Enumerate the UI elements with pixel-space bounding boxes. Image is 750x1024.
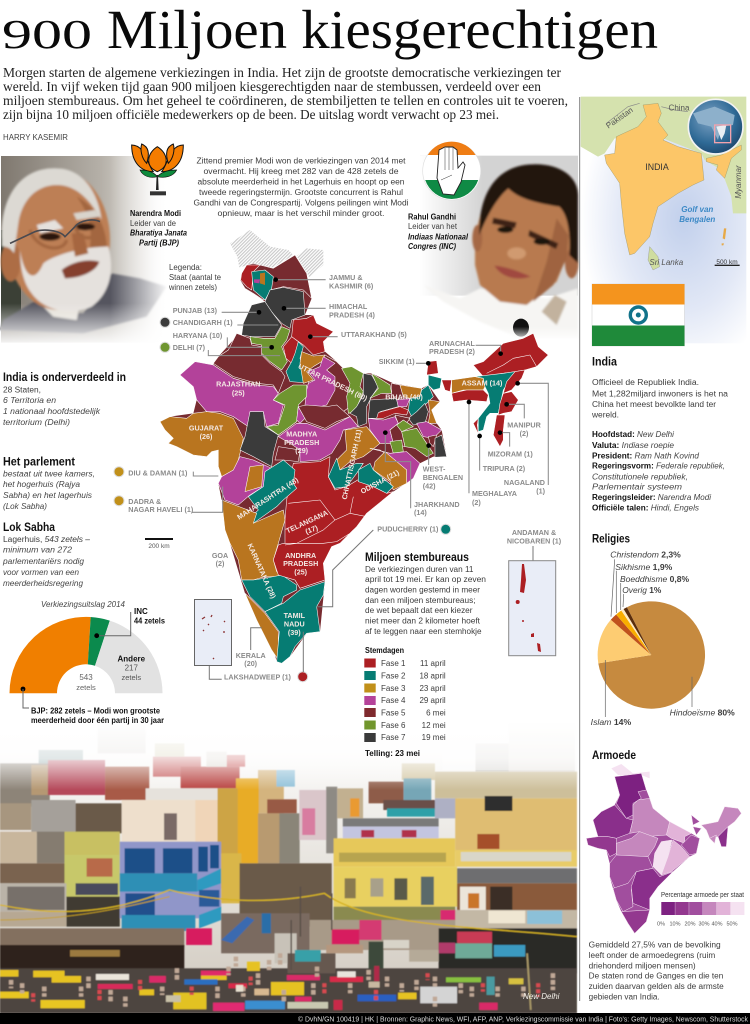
state labels on the map: ODISHA (21): [359, 468, 401, 496]
photo: Narendra Modi: [0, 156, 174, 347]
text: Lok Sabha: Lok Sabha: [3, 520, 55, 534]
legend: voting days: [364, 646, 446, 758]
state labels outside the map: HIMACHAL: [329, 302, 368, 311]
caption: Modi: Leider van de: [130, 219, 177, 228]
state labels outside the map: (42): [423, 482, 436, 490]
state labels outside the map: SIKKIM (1): [379, 357, 415, 366]
map legend note: Staat (aantal te: [169, 273, 222, 282]
Andere label: [118, 654, 146, 682]
state labels on the map: MAHARASHTRA (48): [235, 475, 300, 522]
pie labels: Sikhisme 1,9%: [615, 563, 672, 572]
locator map labels: Sri Lanka: [649, 258, 684, 267]
BJP label: meerderheid door één partij in 30 jaar: [31, 716, 164, 725]
state labels outside the map: JAMMU &: [329, 273, 363, 282]
text: Lok Sabha: meerderheidsregering: [3, 579, 84, 588]
photo caption: New Delhi: [523, 992, 560, 1001]
legend: voting days: Stemdagen: [365, 646, 404, 655]
text: poverty: leeft onder de armoedegrens (ruim: [589, 951, 716, 960]
state: Karnataka and Goa: [222, 500, 297, 612]
state labels on the map: GUJARAT: [189, 424, 224, 432]
text: parliament: (Lok Sabha): [3, 502, 47, 511]
lead text: absolute meerderheid in het Lagerhuis en hoopt op een: [198, 178, 404, 186]
state labels outside the map: DADRA &: [128, 497, 161, 506]
scale bar: 200 km: [148, 543, 170, 550]
locator map labels: Pakistan: [604, 105, 635, 130]
state group: northwest: [180, 287, 333, 427]
BJP lotus logo: [132, 144, 183, 195]
map: India election phases by state: [160, 230, 548, 663]
legend: poverty percentage: 40%: [711, 922, 723, 928]
inset: Lakshadweep: [194, 600, 232, 666]
state labels outside the map: MEGHALAYA: [472, 489, 517, 498]
locator map: [581, 97, 746, 343]
text: polling stations: de wet bepaalt dat een kiezer: [365, 606, 473, 615]
left skyline: [0, 723, 295, 813]
legend: voting days: Fase 3: [381, 684, 406, 693]
state labels outside the map: MIZORAM (1): [488, 450, 533, 458]
photo: Rahul Gandhi: [420, 156, 578, 342]
state labels outside the map: JHARKHAND: [414, 500, 460, 509]
legend: voting days: 23 april: [419, 684, 446, 693]
map leader dots: [257, 277, 520, 448]
state labels on the map: (25): [294, 568, 308, 576]
state labels outside the map: PUNJAB (13): [173, 306, 218, 315]
state labels on the map: MADHYA: [286, 430, 317, 438]
state labels outside the map: NAGALAND: [504, 478, 545, 487]
text: polling stations: Miljoen stembureaus: [365, 550, 469, 564]
state labels on the map: PRADESH: [284, 438, 319, 447]
text: polling stations: niet meer dan 2 kilometer hoeft: [365, 616, 481, 626]
marker dots for small territories: [114, 317, 451, 682]
INC label: [94, 607, 166, 638]
byline: HARRY KASEMIR: [3, 133, 68, 142]
text: poverty: zuiden daarvan gelden als de armste: [589, 982, 724, 991]
legend: poverty percentage: [657, 892, 744, 928]
text: India divided: territorium (Delhi): [3, 418, 70, 427]
country facts: President: Ram Nath Kovind: [592, 451, 700, 460]
state: Andhra Pradesh coast: [273, 530, 353, 588]
country facts: China het meest bevolkte land ter: [592, 400, 716, 409]
state labels outside the map: UTTARAKHAND (5): [341, 330, 407, 339]
state labels on the map: (26): [200, 432, 213, 441]
state labels outside the map: MANIPUR: [507, 420, 542, 430]
locator map labels: China: [669, 104, 690, 112]
flag of India: [592, 284, 684, 346]
state labels outside the map: KERALA: [236, 651, 266, 660]
legend: voting days: Fase 1: [381, 659, 406, 668]
state labels outside the map: TRIPURA (2): [483, 464, 526, 473]
state labels outside the map: (2): [216, 559, 225, 568]
country facts: Officiële talen: Hindi, Engels: [592, 503, 699, 512]
state labels on the map: KARNATAKA (28): [246, 542, 278, 600]
chart: religions pie: [591, 532, 735, 727]
legend: poverty percentage: 10%: [669, 922, 681, 928]
map legend note: [168, 263, 222, 292]
state lines in Telangana: [285, 500, 335, 545]
text: India divided: 28 Staten,: [3, 386, 41, 394]
legend: poverty percentage: 30%: [698, 922, 710, 928]
country facts: Parlementair systeem: [592, 482, 682, 491]
country facts: Regeringsvorm: Federale republiek,: [592, 462, 725, 471]
legend: voting days: Fase 7: [381, 733, 406, 742]
map legend note: winnen zetels): [168, 283, 217, 292]
photo: street scene in New Delhi: [0, 720, 577, 1013]
text: polling stations: april tot 19 mei. Er kan op zeven: [365, 575, 486, 584]
locator map labels: Myanmar: [734, 165, 743, 199]
state: Kerala: [245, 593, 278, 660]
text: India divided: 1 nationaal hoofdstedelijk: [3, 407, 101, 416]
country facts: Valuta: Indiase roepie: [592, 441, 675, 450]
base silhouette of India: [160, 255, 447, 663]
locator map labels: INDIA: [645, 162, 669, 172]
crowd figures: [11, 953, 553, 1007]
map leader lines: [192, 280, 548, 512]
state labels on the map: TELANGANA: [285, 508, 329, 535]
legend: voting days: Fase 6: [381, 721, 406, 730]
Andere label: Andere: [118, 654, 146, 664]
state: Madhya Pradesh: [240, 385, 358, 467]
state labels outside the map: GOA: [212, 551, 228, 560]
text: polling stations: af te leggen naar een stemhokje: [365, 627, 482, 636]
caption: Rahul Gandhi: Leider van het: [408, 222, 458, 231]
chart: election result 2014 half donut: Verkiezingsuitslag 2014: [41, 600, 126, 609]
state: Jammu and Kashmir: [240, 255, 312, 300]
slice: INC: [88, 617, 110, 666]
pie labels: Christendom 2,3%: [610, 550, 681, 560]
state labels outside the map: NICOBAREN (1): [507, 536, 562, 546]
Andere label: 217: [125, 664, 139, 672]
text: India divided: 6 Territoria en: [3, 396, 57, 405]
state labels on the map: NADU: [284, 620, 305, 628]
state labels on the map: CHHATTISGARH (11): [340, 428, 363, 500]
state labels outside the map: (20): [244, 659, 258, 668]
state labels outside the map: PRADESH (2): [429, 347, 476, 356]
locator map labels: Golf van: [681, 205, 713, 214]
legend: voting days: 11 april: [420, 659, 446, 668]
state labels outside the map: KASHMIR (6): [329, 282, 374, 290]
state labels outside the map: (1): [536, 486, 546, 496]
left buildings: [0, 778, 259, 975]
state: Maharashtra: [218, 457, 297, 523]
BJP label: BJP: 282 zetels – Modi won grootste: [31, 706, 161, 716]
chart: election result 2014 half donut: [10, 600, 166, 725]
map: poverty per state: [586, 764, 741, 933]
legend: voting days: Telling: 23 mei: [365, 749, 420, 758]
state labels on the map: BIHAR (40): [385, 392, 423, 402]
text: parliament: bestaat uit twee kamers,: [3, 470, 95, 478]
legend: voting days: 29 april: [419, 696, 446, 705]
locator map labels: Bengalen: [679, 215, 715, 224]
state labels on the map: (17): [304, 523, 320, 536]
legend: voting days: 12 mei: [422, 721, 446, 730]
state labels outside the map: NAGAR HAVELI (1): [128, 505, 194, 514]
text: poverty: De staten rond de Ganges en die ten: [589, 972, 723, 981]
country facts: Hoofdstad: New Delhi: [592, 430, 674, 439]
state labels outside the map: WEST-: [423, 464, 446, 474]
lead text: [194, 156, 409, 218]
state labels on the map: UTTAR PRADESH (80): [297, 362, 369, 403]
state labels outside the map: PRADESH (4): [329, 310, 376, 320]
total seats label: [76, 673, 96, 692]
intro text: [3, 66, 568, 123]
state: Uttar Pradesh: [286, 342, 363, 413]
locator map labels: [604, 104, 743, 267]
title: Miljoen kiesgerechtigen: [107, 0, 658, 60]
state labels outside the map: BENGALEN: [423, 473, 463, 482]
state: West Bengal and Sikkim: [408, 361, 452, 425]
state labels outside the map: (14): [414, 508, 427, 517]
text: parliament: [3, 454, 95, 511]
caption: Rahul Gandhi: Congres (INC): [408, 242, 456, 251]
slice: BJP: [10, 617, 91, 693]
state labels outside the map: DIU & DAMAN (1): [128, 468, 188, 478]
text: Lok Sabha: minimum van 272: [3, 546, 73, 554]
legend: poverty percentage: 50%: [726, 922, 738, 928]
state labels outside the map: ARUNACHAL: [429, 339, 476, 348]
text: poverty: Gemiddeld 27,5% van de bevolking: [589, 940, 721, 950]
state labels outside the map: (2): [520, 429, 529, 438]
right column divider: [579, 97, 580, 1001]
state labels outside the map: PUDUCHERRY (1): [377, 524, 439, 534]
lead text: Gandhi van de Congrespartij. Volgens peilingen wint Modi: [194, 198, 409, 208]
caption: Rahul Gandhi: Indiaas Nationaal: [408, 232, 469, 242]
country facts: Constitutionele republiek,: [592, 472, 688, 481]
right skyline: [310, 723, 577, 973]
slice: Andere: [95, 621, 162, 693]
state labels on the map: (25): [232, 388, 245, 398]
caption: Modi: Bharatiya Janata: [130, 228, 187, 238]
base silhouette: [586, 773, 700, 933]
intro text: miljoen stembureaus. Om het geheel te coördineren, de stembiljetten te tellen en controles uit te voeren,: [3, 94, 568, 109]
pie labels: Islam 14%: [591, 718, 631, 727]
caption: Modi: [130, 209, 187, 248]
legend: voting days: 6 mei: [426, 708, 446, 718]
microphone: [513, 319, 529, 337]
state labels outside the map: CHANDIGARH (1): [173, 318, 233, 327]
disputed territory hatching: [230, 230, 323, 277]
state labels on the map: TAMIL: [284, 611, 306, 620]
scale bar: [145, 538, 173, 550]
lead text: overmacht. Hij kreeg met 282 van de 428 zetels de: [204, 167, 399, 176]
caption: Rahul Gandhi: Rahul Gandhi: [408, 212, 456, 222]
text: parliament: het hogerhuis (Rajya: [3, 480, 81, 489]
state labels outside the map: ANDAMAN &: [512, 528, 556, 537]
state labels on the map: ANDHRA: [285, 551, 316, 560]
country facts: Met 1,282miljard inwoners is het na: [592, 390, 729, 398]
state labels on the map: [189, 362, 503, 637]
state labels on the map: ASSAM (14): [462, 378, 503, 388]
text: Lok Sabha: voor vormen van een: [3, 568, 80, 577]
text: parliament: Sabha) en het lagerhuis: [3, 491, 92, 500]
INC label: 44 zetels: [134, 616, 166, 626]
state labels on the map: PRADESH: [283, 559, 318, 568]
northeastern states: [452, 333, 548, 447]
title: 900: [2, 11, 92, 57]
state labels outside the map: LAKSHADWEEP (1): [224, 672, 292, 682]
lead text: tweede regeringstermijn. Grootste concurrent is Rahul: [199, 188, 403, 197]
southern leader lines: [209, 530, 533, 679]
text: poverty: driehonderd miljoen mensen): [589, 961, 696, 970]
pie labels: [591, 550, 735, 727]
state labels on the map: (39): [288, 628, 301, 637]
text: Lok Sabha: Lagerhuis, 543 zetels –: [3, 535, 91, 544]
state labels outside the map: [128, 273, 562, 682]
legend: voting days: Fase 5: [381, 708, 406, 718]
text: Lok Sabha: [2, 520, 91, 588]
text: parliament: Het parlement: [3, 454, 75, 468]
pie labels: Overig 1%: [622, 586, 661, 595]
crowded street: [0, 887, 577, 1013]
total seats label: zetels: [76, 683, 96, 692]
state: Gujarat: [160, 412, 243, 477]
inset: Andaman and Nicobar: [509, 561, 556, 656]
legend: voting days: 19 mei: [422, 733, 446, 742]
Congress hand logo: [423, 142, 481, 200]
intro text: Morgen starten de algemene verkiezingen in India. Het zijn de grootste democratische verkiezingen ter: [3, 66, 561, 81]
state labels outside the map: (2): [472, 498, 481, 507]
globe: [688, 99, 743, 154]
legend: voting days: Fase 2: [381, 672, 406, 680]
India on locator map: [605, 103, 741, 255]
BJP label: [21, 687, 164, 725]
state labels on the map: (29): [295, 446, 309, 455]
locator map labels: 500 km: [716, 259, 738, 266]
country facts: Officieel de Republiek India.: [592, 378, 699, 387]
state labels outside the map: DELHI (7): [173, 343, 206, 352]
legend: voting days: 18 april: [419, 672, 446, 680]
intro text: zijn bijna 10 miljoen officiële medewerkers op de been. De uitslag wordt verwacht op 23 mei.: [3, 108, 499, 123]
text: polling stations: De verkiezingen duren van 11: [365, 565, 474, 574]
slice: Hinduism: [598, 601, 705, 709]
caption: Rahul Gandhi: [408, 212, 469, 251]
text: India divided: [3, 370, 126, 427]
text: poverty: [589, 940, 724, 1001]
pie labels: Boeddhisme 0,8%: [620, 575, 689, 584]
country facts: [591, 354, 729, 512]
slice: Islam: [598, 620, 651, 663]
country facts: wereld.: [591, 410, 619, 420]
total seats label: 543: [79, 673, 93, 682]
text: Lok Sabha: parlementariërs nodig: [2, 557, 85, 566]
state: Chhattisgarh, Jharkhand, Odisha region: [273, 415, 447, 588]
heading: poverty: Armoede: [592, 748, 636, 762]
legend: poverty percentage: 0%: [657, 922, 665, 928]
lead text: opnieuw, maar is het verschil minder groot.: [218, 209, 384, 218]
legend: poverty percentage: 20%: [684, 922, 696, 928]
state labels outside the map: HARYANA (10): [173, 331, 223, 340]
state: Bihar: [350, 373, 422, 427]
lead text: Zittend premier Modi won de verkiezingen van 2014 met: [196, 156, 406, 166]
footer bar: [0, 1013, 750, 1024]
text: polling stations: dagen worden gestemd in meer: [365, 586, 480, 594]
map legend note: Legenda:: [169, 263, 202, 272]
caption: Modi: Partij (BJP): [139, 238, 179, 248]
state: Tamil Nadu: [265, 582, 325, 663]
central alley: [221, 787, 363, 963]
text: polling stations: dan een miljoen stembureaus;: [365, 596, 476, 605]
Andere label: zetels: [122, 673, 141, 682]
text: polling stations: [365, 550, 486, 636]
pie labels: Hindoeïsme 80%: [670, 708, 735, 718]
text: India divided: India is onderverdeeld in: [3, 370, 126, 384]
INC label: INC: [134, 607, 148, 616]
state labels on the map: RAJASTHAN: [216, 380, 260, 388]
chart: religions pie: Religies: [592, 532, 630, 546]
country facts: India: [592, 354, 617, 368]
country facts: Regeringsleider: Narendra Modi: [592, 493, 711, 502]
text: poverty: gebieden van India.: [589, 992, 660, 1001]
legend: voting days: Fase 4: [381, 696, 406, 705]
caption: Modi: Narendra Modi: [130, 209, 181, 218]
intro text: wereld. In vijf weken tijd gaan 900 miljoen kiesgerechtigden naar de stembussen, verdeeld over een: [3, 80, 541, 95]
